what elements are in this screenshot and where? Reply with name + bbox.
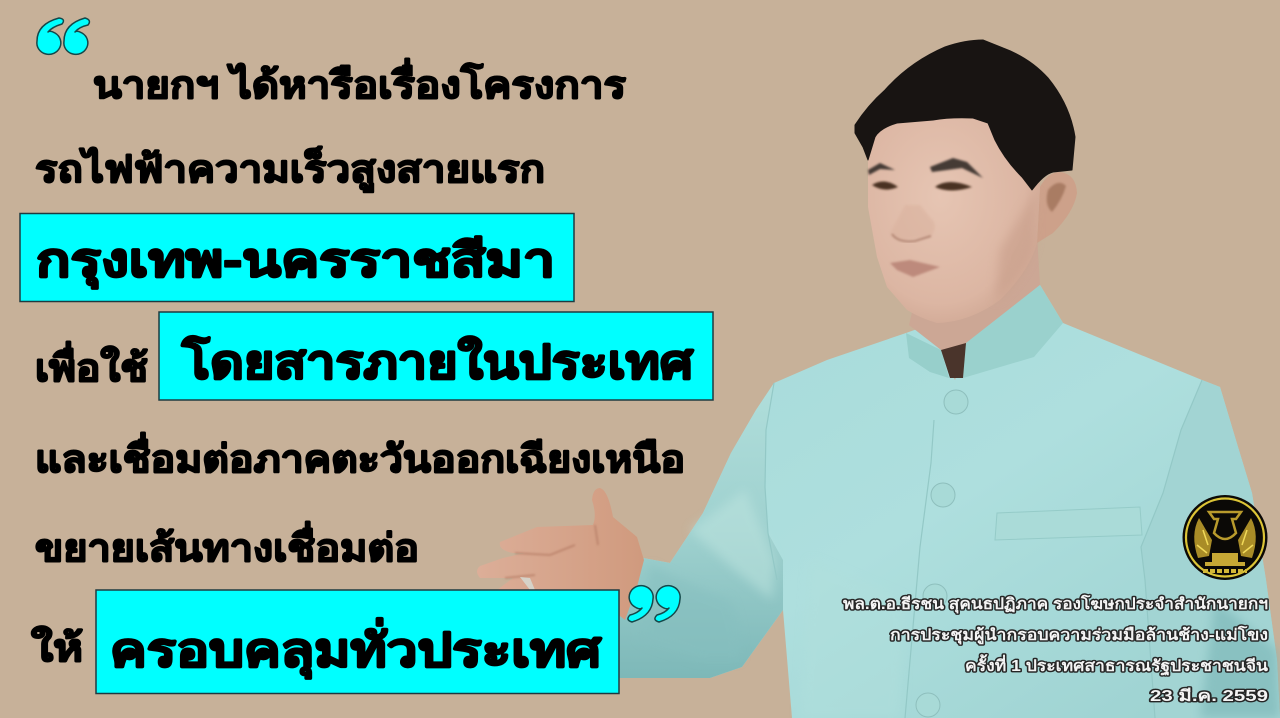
icon: closing quote mark xyxy=(628,586,680,622)
eyebrows xyxy=(868,158,983,178)
finger creases xyxy=(505,525,598,578)
seal: bottom pattern xyxy=(1203,569,1247,573)
highlight box 1 xyxy=(20,214,574,302)
buttons xyxy=(916,390,968,717)
caption: ครั้งที่ 1 ประเทศสาธารณรัฐประชาชนจีน xyxy=(965,654,1268,676)
highlight box 1: กรุงเทพ-นครราชสีมา xyxy=(36,234,555,289)
hand xyxy=(477,488,644,620)
jacket seams xyxy=(765,380,1202,718)
ring xyxy=(520,577,535,590)
highlight box 3: ครอบคลุมทั่วประเทศ xyxy=(110,618,602,679)
caption xyxy=(843,594,1268,705)
caption: พล.ต.อ.ธีรชน สุคนธปฏิภาค รองโฆษกประจำสำนักนายกฯ xyxy=(843,594,1268,614)
ear xyxy=(1037,172,1077,243)
nose xyxy=(890,205,935,240)
sleeve fold shading xyxy=(640,565,740,660)
text line 6: ขยายเส้นทางเชื่อมต่อ xyxy=(35,521,419,570)
nostril line xyxy=(892,234,931,241)
face xyxy=(868,105,1040,323)
text line 2: รถไฟฟ้าความเร็วสูงสายแรก xyxy=(35,146,545,193)
ear inner shadow xyxy=(1047,183,1066,212)
icon: opening quote mark xyxy=(37,18,89,54)
text line 5: และเชื่อมต่อภาคตะวันออกเฉียงเหนือ xyxy=(35,432,685,481)
text line 1: นายกฯ ได้หารือเรื่องโครงการ xyxy=(93,58,627,107)
highlight box 3 xyxy=(96,590,619,694)
seal: urn and dais xyxy=(1209,512,1241,539)
seal: guardian lions xyxy=(1194,518,1256,558)
person: portrait illustration xyxy=(477,40,1280,718)
sleeve: right arm xyxy=(1141,380,1280,718)
highlight box 2 xyxy=(159,312,713,400)
jacket side shading xyxy=(1200,600,1280,718)
neck xyxy=(909,235,1040,380)
face edge shadow xyxy=(995,190,1036,302)
body: light teal jacket xyxy=(618,285,1280,718)
mouth xyxy=(890,260,940,277)
hair xyxy=(855,40,1075,190)
caption: 23 มี.ค. 2559 xyxy=(1150,687,1268,705)
text line 7: ให้ xyxy=(31,626,83,670)
emblem: government seal xyxy=(1182,495,1268,580)
highlight box 2: โดยสารภายในประเทศ xyxy=(181,335,694,388)
sleeve: left arm xyxy=(618,383,783,678)
eyes xyxy=(872,181,972,190)
collar xyxy=(906,285,1063,378)
pocket xyxy=(995,507,1142,540)
caption: การประชุมผู้นำกรอบความร่วมมือล้านช้าง-แม่โขง xyxy=(890,625,1268,646)
text line 4: เพื่อใช้ xyxy=(35,341,148,390)
